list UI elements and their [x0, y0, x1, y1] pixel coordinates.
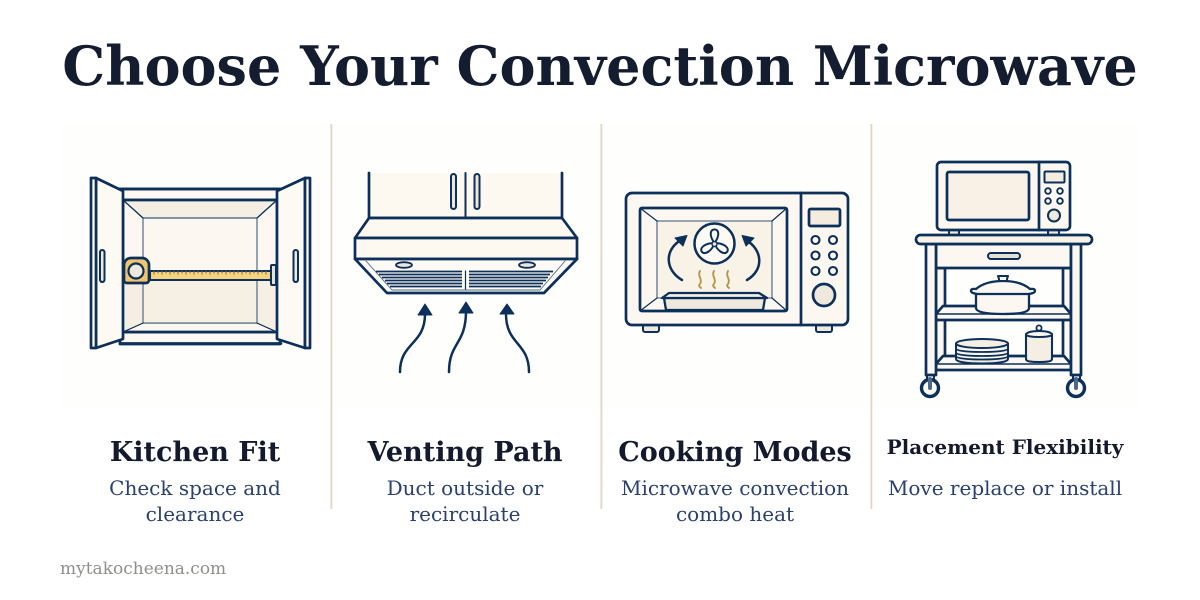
- tape measure: [124, 258, 276, 285]
- icon: cabinet with tape measure: [91, 178, 310, 348]
- text: Kitchen Fit description: [109, 476, 281, 526]
- heat waves: [699, 271, 729, 288]
- circulation arrows: [669, 236, 759, 280]
- text: Kitchen Fit description: clearance: [146, 502, 244, 526]
- left door: [91, 178, 123, 348]
- text: Cooking Modes description: combo heat: [676, 502, 794, 526]
- arrows: [400, 302, 529, 372]
- right door: [277, 178, 310, 348]
- heading: Placement Flexibility: Placement Flexibility: [887, 435, 1123, 459]
- plates: [956, 339, 1008, 364]
- title: Choose Your Convection Microwave: [62, 34, 1138, 98]
- text: Placement Flexibility description: Move replace or install: [888, 476, 1122, 500]
- heading: Kitchen Fit: Kitchen Fit: [110, 437, 280, 468]
- text: Venting Path description: Duct outside or: [387, 476, 543, 500]
- heading: Cooking Modes: Cooking Modes: [618, 437, 852, 468]
- text: Cooking Modes description: [621, 476, 849, 526]
- icon: microwave on rolling cart: [916, 162, 1092, 396]
- wheels: [922, 375, 1084, 396]
- text: Kitchen Fit description: Check space and: [109, 476, 281, 500]
- control panel: [809, 209, 840, 306]
- heading: Venting Path: Venting Path: [367, 437, 563, 468]
- text: Cooking Modes description: Microwave convection: [621, 476, 849, 500]
- footer: source: mytakocheena.com: [60, 559, 226, 579]
- text: Venting Path description: [387, 476, 544, 526]
- cart: [916, 235, 1092, 375]
- text: Venting Path description: recirculate: [410, 502, 520, 526]
- jar: [1026, 325, 1052, 362]
- microwave: [937, 162, 1070, 235]
- icon: range hood with rising air: [355, 173, 577, 372]
- baking tray: [662, 293, 767, 310]
- pot: [971, 276, 1035, 314]
- icon: convection microwave: [626, 193, 848, 332]
- fan: [694, 224, 734, 264]
